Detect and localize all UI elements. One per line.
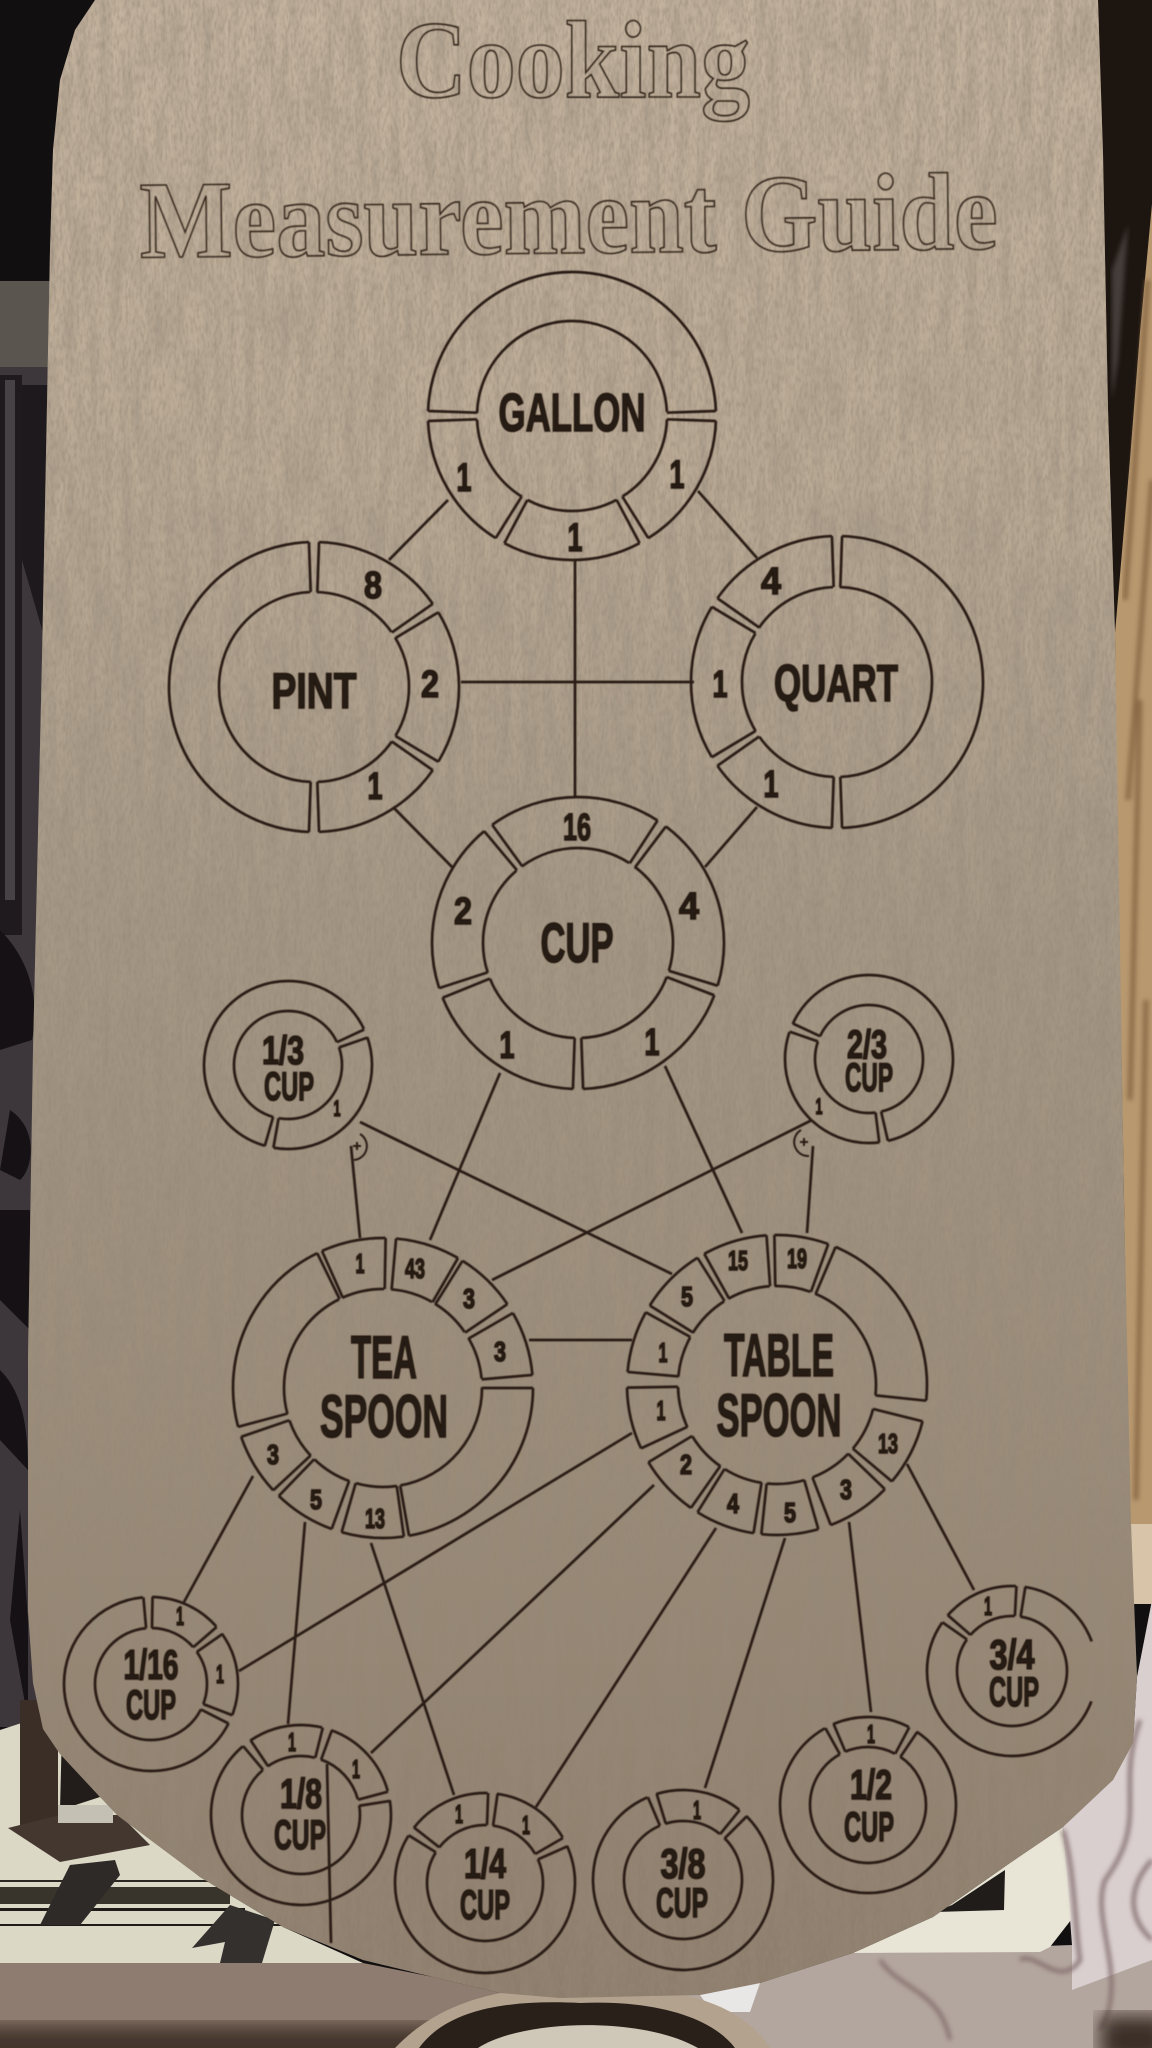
label: teaspoon: SPOON [320, 1383, 448, 1450]
connector lines [184, 491, 974, 1943]
label: 3/4 cup [984, 1591, 1039, 1715]
label: 1/8 cup: CUP [274, 1811, 326, 1858]
label: 2/3 cup: 1 [816, 1094, 822, 1119]
numbers: teaspoon: 3 [267, 1439, 279, 1470]
label: 1/4 cup: CUP [460, 1881, 510, 1928]
label: 3/4 cup: CUP [989, 1668, 1039, 1715]
label: quart: QUART [774, 655, 898, 713]
circle: cup [432, 797, 724, 1089]
label: 3/8 cup: 3/8 [660, 1840, 706, 1887]
label: 1/3 cup: 1/3 [262, 1029, 304, 1073]
circle: 1/2 cup [780, 1717, 956, 1893]
numbers: tablespoon: 3 [840, 1474, 852, 1505]
numbers: cup: 1 [644, 1022, 660, 1064]
label: 1/8 cup: 1 [352, 1754, 360, 1784]
circle: gallon [428, 272, 716, 560]
numbers: teaspoon: 3 [463, 1283, 475, 1314]
circle: pint [169, 542, 459, 832]
numbers: cup: 16 [563, 807, 591, 849]
label: 1/16 cup [124, 1601, 224, 1728]
circle: teaspoon [233, 1238, 533, 1538]
label: pint: PINT [272, 663, 356, 719]
numbers: tablespoon: 15 [728, 1245, 748, 1276]
numbers: teaspoon: 1 [356, 1248, 364, 1279]
label: 3/4 cup: 3/4 [990, 1631, 1035, 1678]
numbers: tablespoon: 5 [784, 1497, 796, 1528]
label: 1/16 cup: 1 [176, 1601, 184, 1631]
numbers: tablespoon: 13 [878, 1428, 898, 1459]
label: 1/3 cup: 1 [334, 1096, 340, 1121]
label: 3/8 cup [656, 1795, 708, 1926]
label: 1/8 cup [274, 1727, 360, 1858]
label: cup: CUP [540, 911, 614, 974]
label: 1/2 cup: CUP [844, 1803, 894, 1850]
circle: 1/8 cup [211, 1725, 391, 1905]
numbers: cup: 4 [679, 886, 699, 928]
numbers: teaspoon: 5 [310, 1484, 322, 1515]
title: Cooking [396, 0, 750, 121]
numbers: gallon: 1 [456, 456, 472, 500]
numbers: tablespoon: 1 [658, 1337, 668, 1368]
label: 2/3 cup [816, 1023, 893, 1119]
engraved guide [64, 272, 1097, 1973]
circle: quart [691, 536, 983, 828]
label: 1/2 cup [844, 1719, 894, 1850]
label: tablespoon [716, 1322, 842, 1449]
numbers: teaspoon: 43 [405, 1253, 425, 1284]
numbers: pint: 8 [364, 565, 382, 607]
label: 1/4 cup: 1 [522, 1810, 530, 1840]
numbers: quart: 4 [761, 561, 781, 603]
label: 1/2 cup: 1 [867, 1719, 875, 1749]
numbers: gallon [456, 453, 684, 560]
numbers: teaspoon: 3 [494, 1336, 506, 1367]
numbers: tablespoon [656, 1243, 898, 1528]
circle: 3/8 cup [593, 1790, 773, 1970]
label: 1/16 cup: 1 [216, 1659, 224, 1689]
label: 3/8 cup: 1 [693, 1795, 701, 1825]
label: 2/3 cup: CUP [845, 1056, 893, 1100]
label: tablespoon: TABLE [724, 1322, 834, 1389]
numbers: tablespoon: 2 [680, 1449, 692, 1480]
label: 3/8 cup: CUP [656, 1879, 708, 1926]
label: teaspoon [320, 1324, 448, 1450]
label: 2/3 cup: 2/3 [847, 1023, 887, 1067]
numbers: pint [364, 565, 439, 808]
label: 1/4 cup [455, 1799, 530, 1928]
numbers: tablespoon: 4 [727, 1488, 739, 1519]
circle: tablespoon [627, 1235, 927, 1535]
numbers: cup: 1 [500, 1025, 514, 1067]
numbers: quart: 1 [764, 764, 778, 806]
circle: 1/16 cup [64, 1597, 238, 1771]
circle: 3/4 cup [927, 1586, 1097, 1756]
numbers: tablespoon: 1 [656, 1395, 666, 1426]
numbers: cup: 2 [454, 891, 472, 933]
label: 1/16 cup: 1/16 [124, 1641, 178, 1688]
label: 1/3 cup [262, 1029, 340, 1121]
label: tablespoon: SPOON [716, 1382, 842, 1449]
circle: 2/3 cup [785, 975, 953, 1143]
title [139, 0, 998, 282]
label: 1/4 cup: 1 [455, 1799, 463, 1829]
label: 1/3 cup: CUP [264, 1065, 314, 1109]
label: 1/8 cup: 1/8 [280, 1770, 322, 1817]
numbers: teaspoon: 13 [365, 1503, 385, 1534]
numbers: teaspoon [267, 1248, 506, 1534]
numbers: pint: 2 [421, 664, 439, 706]
label: gallon: GALLON [498, 383, 646, 443]
numbers: pint: 1 [368, 766, 382, 808]
numbers: quart: 1 [712, 664, 728, 706]
numbers: gallon: 1 [568, 516, 582, 560]
circle: 1/3 cup [204, 981, 372, 1149]
label: 1/8 cup: 1 [288, 1727, 296, 1757]
numbers: gallon: 1 [670, 453, 684, 497]
label: teaspoon: TEA [351, 1324, 417, 1391]
label: 3/4 cup: 1 [984, 1591, 992, 1621]
label: 1/2 cup: 1/2 [850, 1761, 892, 1808]
label: 1/4 cup: 1/4 [464, 1840, 506, 1887]
numbers: tablespoon: 5 [681, 1281, 693, 1312]
circle: 1/4 cup [395, 1793, 575, 1973]
numbers: tablespoon: 19 [787, 1243, 807, 1274]
numbers: quart [712, 561, 781, 806]
title: Measurement Guide [139, 151, 998, 282]
numbers: cup [454, 807, 699, 1067]
label: 1/16 cup: CUP [126, 1681, 176, 1728]
